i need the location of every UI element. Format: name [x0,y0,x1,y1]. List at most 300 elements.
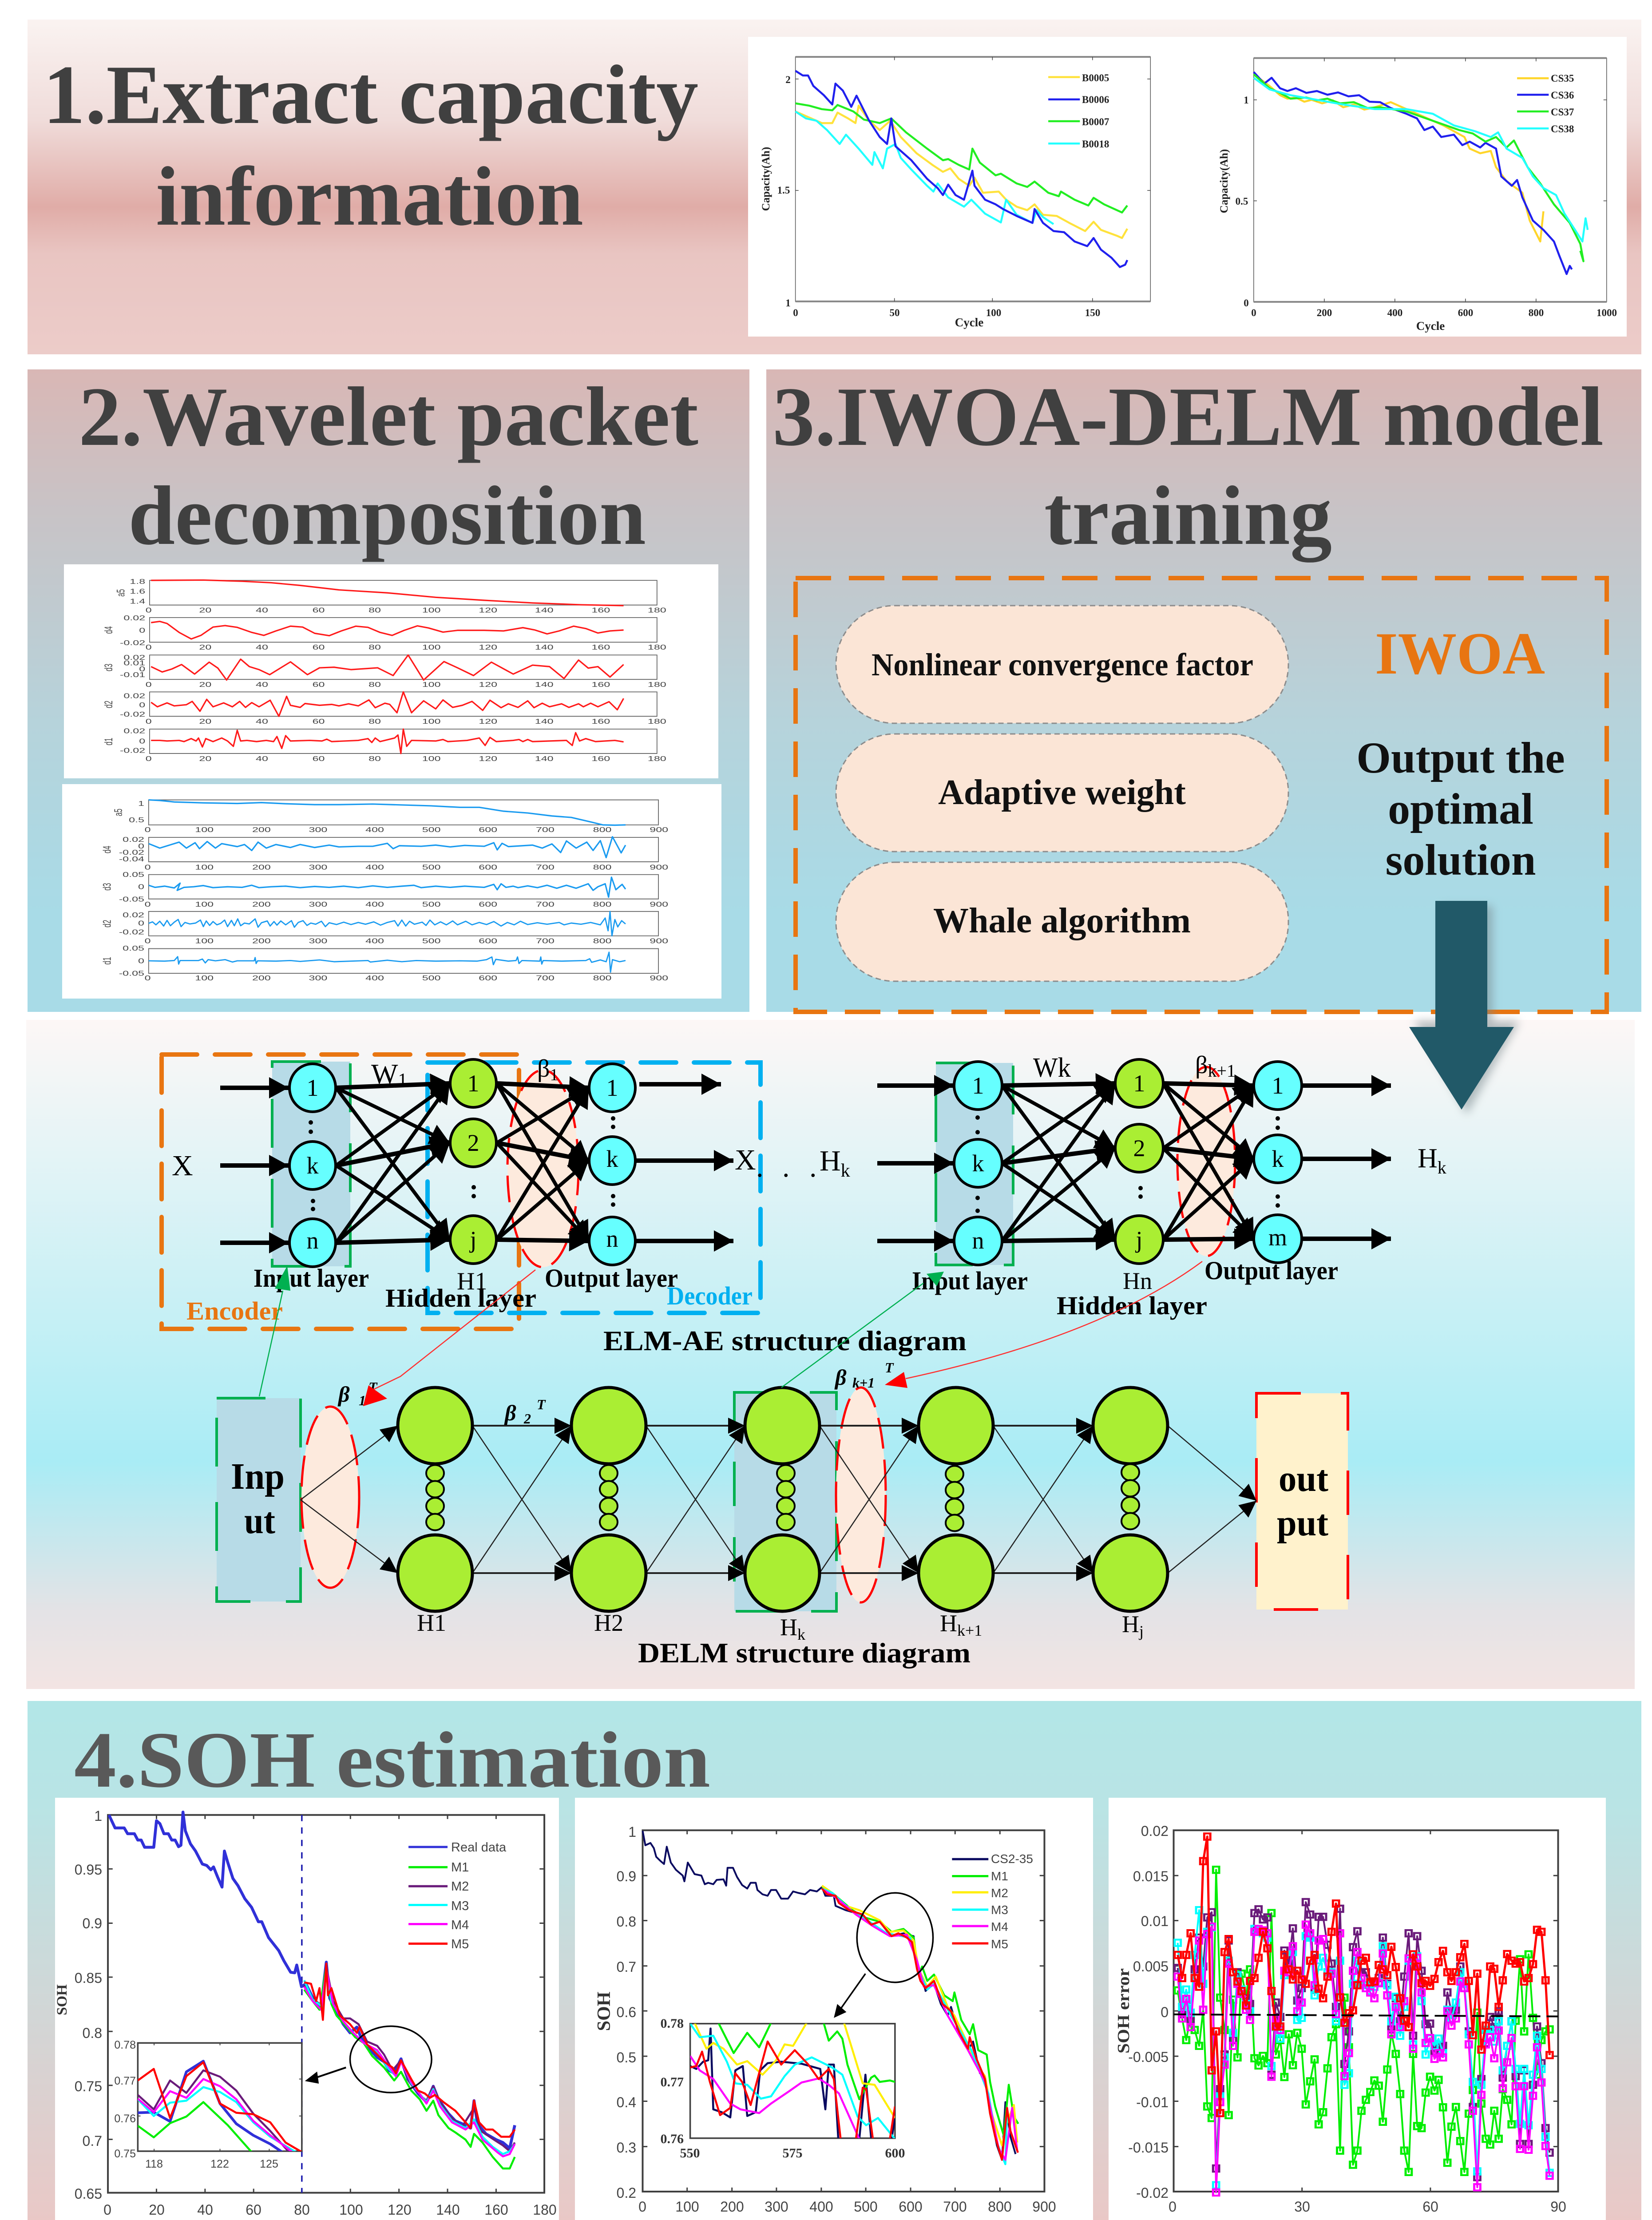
wavelet chart: red decomposition: 0.02 [123,654,145,662]
beta labels: k+1 [852,1375,875,1391]
beta labels: T [885,1360,894,1376]
chart B: SOH estimation CS2: M5 [991,1937,1008,1951]
chart B: SOH estimation CS2: 0.6 [617,2004,636,2020]
chart A: SOH estimation NASA: 140 [436,2202,460,2218]
wavelet chart: red decomposition: 140 [535,755,554,762]
labels ELM-AE left: 1 [398,1070,407,1090]
wavelet chart: red decomposition: 20 [199,755,211,762]
neurons input [289,1064,635,1267]
neuron labels: k [1272,1146,1284,1172]
wavelet chart: blue decomposition: 0.02 [123,912,144,919]
wavelet chart: blue decomposition: 0.05 [123,945,144,952]
chart C: SOH error: 0.015 [1133,1868,1169,1884]
wavelet chart: blue decomposition: 0 [145,937,151,945]
text: output the optimal solution: optimal [1388,784,1533,833]
neuron labels: 2 [467,1130,479,1156]
neuron labels: k [306,1152,319,1179]
wavelet chart: blue decomposition: 0 [145,864,151,871]
input block: ut [244,1500,275,1542]
DELM layer labels: k+1 [957,1621,982,1639]
wavelet chart: red decomposition: -0.02 [120,639,145,647]
wavelet chart: blue decomposition: 0.5 [129,816,144,824]
chart B: SOH estimation CS2: 0.5 [617,2050,636,2065]
wavelet chart: blue decomposition: d2 [101,920,114,928]
panel 2 background [28,369,749,1012]
labels ELM-AE left: W [371,1058,398,1090]
chart B: SOH estimation CS2: 600 [885,2146,905,2161]
neurons hidden [1115,1059,1163,1264]
wavelet chart: blue decomposition: -0.02 [119,928,144,936]
wavelet chart: blue decomposition: 200 [252,975,271,982]
wavelet chart: red decomposition: 100 [422,718,441,725]
chart A: SOH estimation NASA: 180 [533,2202,557,2218]
labels ELM-AE left: . [782,1151,789,1183]
wavelet chart: blue decomposition: 1 [138,800,144,808]
chart: NASA battery capacity curves: B0005 [1082,72,1109,83]
wavelet chart: blue decomposition: 400 [365,864,384,871]
beta labels: T [537,1396,546,1412]
chart C: SOH error: -0.015 [1128,2140,1169,2156]
chart: NASA battery capacity curves: Capacity(Ah) [760,147,772,211]
chart: NASA battery capacity curves: 2 [785,74,791,85]
labels ELM-AE left: . [809,1151,817,1183]
chart A: SOH estimation NASA: 0.65 [75,2186,102,2202]
beta labels: β [337,1382,350,1407]
wavelet chart: blue decomposition: 700 [536,975,555,982]
hidden block Hk highlight [734,1392,836,1611]
wavelet chart: red decomposition: 40 [256,718,268,725]
chart A: SOH estimation NASA: 80 [294,2202,310,2218]
chart: NASA battery capacity curves: 0 [793,307,798,318]
wavelet chart: red decomposition: 100 [422,644,441,651]
ELM-AE network: second stage: Output layer [1204,1256,1338,1285]
ELM-AE network: encoder and decoder: Input layer [254,1264,369,1292]
encoder dashed box [162,1054,519,1329]
ELM-AE network: encoder and decoder: Encoder [186,1296,283,1325]
wavelet chart: blue decomposition: 800 [593,975,611,982]
wavelet chart: red decomposition: 0 [139,737,145,745]
middle panel background [26,1020,1635,1689]
panel: ELM-AE and DELM structure [26,1020,1635,1689]
chart A: SOH estimation NASA: 20 [149,2202,165,2218]
wavelet chart: blue decomposition: 0 [138,842,144,850]
wavelet chart: blue decomposition: 600 [479,901,497,908]
beta labels: β [504,1400,516,1425]
wavelet chart: red decomposition: 1.6 [130,588,145,595]
panel 3: IWOA-DELM model training [766,369,1641,1012]
wavelet chart: red decomposition: 0 [146,755,152,762]
wavelet chart: red decomposition: 20 [199,644,211,651]
wavelet chart: red decomposition: 100 [422,755,441,762]
DELM neurons [398,1388,1168,1611]
chart: CS2 battery capacity curves [1218,58,1617,333]
chart C: SOH error: 0.01 [1141,1913,1169,1929]
neuron labels [972,1070,1287,1254]
wavelet chart: red decomposition: 40 [256,681,268,689]
wavelet chart: red decomposition: -0.01 [120,671,145,679]
wavelet chart: blue decomposition: 500 [422,937,441,945]
chart: CS2 battery capacity curves: 800 [1529,307,1544,318]
wavelet chart: red decomposition: 120 [479,644,497,651]
wavelet chart: blue decomposition: 300 [309,901,327,908]
chart B: SOH estimation CS2: 0.3 [617,2140,636,2156]
wavelet chart: red decomposition: 1.8 [130,578,145,586]
panel 3 background [766,369,1641,1012]
chart B: SOH estimation CS2: 100 [675,2199,699,2215]
chart A: SOH estimation NASA [54,1798,559,2220]
DELM network [217,1360,1348,1643]
ELM-AE network: encoder and decoder [162,1054,850,1329]
chart B: SOH estimation CS2: 700 [943,2199,967,2215]
panel 2: wavelet packet decomposition [28,369,749,1012]
neuron labels: 1 [1133,1070,1145,1097]
chart B: SOH estimation CS2: 500 [854,2199,878,2215]
chart A: SOH estimation NASA: 0.78 [114,2039,136,2051]
DELM layer labels: H [780,1614,797,1641]
arrow: red beta link 1 [363,1270,535,1406]
DELM layer labels: j [1138,1622,1144,1640]
neurons input and output [954,1062,1302,1265]
wavelet chart: blue decomposition: 100 [195,826,214,834]
wavelet chart: red decomposition: 180 [648,681,666,689]
chart A: SOH estimation NASA: 0 [103,2202,111,2218]
wavelet chart: blue decomposition: 900 [650,901,668,908]
wavelet chart: red decomposition: 60 [313,755,325,762]
wavelet chart: red decomposition: 0.02 [123,727,145,735]
heading: 1.Extract capacity information: 1.Extract capacity [43,48,698,142]
DELM layer labels: k [797,1625,805,1643]
heading: ELM-AE structure diagram: ELM-AE structure diagram [603,1325,967,1356]
vertical dots [309,1116,615,1211]
arrow: from model training to structure diagram [1409,901,1519,1114]
IWOA dashed box [796,578,1607,1012]
wavelet chart: red decomposition: 180 [648,644,666,651]
wavelet chart: red decomposition: 0.02 [123,692,145,700]
chart C: SOH error: 0.005 [1133,1958,1169,1974]
wavelet chart: red decomposition: 180 [648,607,666,614]
chart B: SOH estimation CS2: 0 [638,2199,646,2215]
wavelet chart: red decomposition: -0.02 [120,747,145,754]
chart A: SOH estimation NASA: Real data [451,1840,507,1855]
pill: nonlinear convergence factor: Nonlinear convergence factor [872,647,1253,682]
wavelet chart: blue decomposition: 0 [138,957,144,965]
wavelet chart: blue decomposition: -0.05 [119,896,144,903]
chart C: SOH error: 60 [1422,2199,1438,2215]
chart A: SOH estimation NASA: 100 [339,2202,363,2218]
wavelet chart: red decomposition: 60 [313,681,325,689]
chart: NASA battery capacity curves: B0007 [1082,116,1109,127]
neuron labels: 1 [306,1074,319,1101]
arrow: green input link 2 [781,1272,944,1388]
wavelet chart: blue decomposition: d3 [101,883,114,891]
chart A: SOH estimation NASA: M1 [451,1860,469,1875]
vertical dots [975,1115,1280,1213]
wavelet chart: red decomposition: 120 [479,607,497,614]
wavelet chart: red decomposition: 160 [591,755,610,762]
chart A: SOH estimation NASA: 120 [388,2202,412,2218]
chart C: SOH error: 0 [1169,2199,1177,2215]
ELM-AE network: second stage: Hidden layer [1057,1291,1207,1320]
wavelet chart: red decomposition: d2 [103,701,115,708]
wavelet chart: blue decomposition: 500 [422,864,441,871]
chart: NASA battery capacity curves: 1 [785,297,791,309]
chart A: SOH estimation NASA: 0.75 [75,2078,102,2094]
pill: whale algorithm [836,862,1288,981]
wavelet chart: red decomposition: 180 [648,755,666,762]
chart B: SOH estimation CS2: 200 [720,2199,744,2215]
wavelet chart: red decomposition: 80 [368,607,381,614]
wavelet chart: blue decomposition: 0 [138,883,144,891]
labels ELM-AE left: H1 [457,1268,487,1295]
chart A: SOH estimation NASA: 122 [210,2158,229,2170]
wavelet chart: blue decomposition: 0 [145,975,151,982]
chart B: SOH estimation CS2: 400 [809,2199,833,2215]
wavelet chart: red decomposition [64,564,718,778]
chart B: SOH estimation CS2: 800 [988,2199,1012,2215]
wavelet chart: blue decomposition: -0.04 [119,856,144,863]
chart B: SOH estimation CS2: M1 [991,1869,1008,1883]
chart B: SOH estimation CS2: 1 [628,1824,636,1840]
heading: 3.IWOA-DELM model training: training [1044,469,1332,563]
decoder dashed box [428,1062,761,1313]
chart C: SOH error: 90 [1550,2199,1566,2215]
wavelet chart: blue decomposition: 500 [422,901,441,908]
connections encoder [220,1083,733,1243]
wavelet chart: red decomposition: 140 [535,607,554,614]
neuron labels: n [306,1227,319,1254]
wavelet chart: blue decomposition: 0 [145,826,151,834]
ELM-AE network: encoder and decoder: Output layer [545,1264,678,1292]
wavelet chart: red decomposition: 80 [368,644,381,651]
wavelet chart: red decomposition: 20 [199,718,211,725]
beta k+1 ellipse [1177,1067,1235,1256]
neuron labels: 2 [1133,1135,1145,1162]
beta labels: T [368,1379,378,1395]
wavelet chart: blue decomposition: 700 [536,826,555,834]
wavelet chart: blue decomposition: 900 [650,937,668,945]
wavelet chart: blue decomposition: 100 [195,901,214,908]
wavelet chart: blue decomposition: 200 [252,826,271,834]
wavelet chart: red decomposition: 120 [479,718,497,725]
chart C: SOH error: -0.01 [1136,2094,1169,2110]
heading: 1.Extract capacity information [43,48,698,243]
pill: adaptive weight [836,734,1288,852]
labels second stage: Hn [1123,1268,1152,1294]
wavelet chart: blue decomposition: 800 [593,937,611,945]
pill: adaptive weight: Adaptive weight [938,773,1186,812]
ELM-AE network: second stage: Input layer [912,1266,1028,1295]
heading: 2.Wavelet packet decomposition: decomposition [128,469,646,563]
chart A: SOH estimation NASA: SOH [54,1984,70,2015]
input block [217,1398,301,1602]
chart A: SOH estimation NASA: 125 [260,2158,278,2170]
neuron labels: n [606,1225,618,1252]
ELM-AE network: encoder and decoder: Hidden layer [385,1284,536,1312]
chart: CS2 battery capacity curves: 600 [1458,307,1473,318]
heading: 3.IWOA-DELM model training: 3.IWOA-DELM model [773,370,1604,464]
chart C: SOH error: 0.02 [1141,1823,1169,1839]
wavelet chart: blue decomposition: 100 [195,937,214,945]
output block: out [1279,1458,1328,1499]
wavelet chart: red decomposition: d4 [103,626,115,634]
beta labels: 1 [359,1392,366,1408]
chart B: SOH estimation CS2: 550 [680,2146,700,2161]
DELM layer labels: H2 [594,1610,623,1636]
wavelet chart: red decomposition: 160 [591,644,610,651]
neuron labels: 1 [606,1074,618,1101]
neuron labels: 1 [972,1072,984,1099]
ELM-AE network: encoder and decoder: Decoder [667,1281,753,1310]
wavelet chart: blue decomposition: 600 [479,975,497,982]
wavelet chart: red decomposition: 40 [256,644,268,651]
chart B: SOH estimation CS2: 300 [765,2199,788,2215]
wavelet chart: blue decomposition: 300 [309,937,327,945]
labels ELM-AE left: X [172,1150,193,1182]
chart B: SOH estimation CS2 [575,1798,1093,2220]
chart A: SOH estimation NASA: 0.76 [114,2113,136,2125]
wavelet chart: blue decomposition: 0.05 [123,871,144,879]
wavelet chart: red decomposition: 80 [368,718,381,725]
wavelet chart: blue decomposition: 600 [479,864,497,871]
chart A: SOH estimation NASA: M3 [451,1899,469,1913]
wavelet chart: blue decomposition: 200 [252,864,271,871]
chart: NASA battery capacity curves: 50 [890,307,899,318]
wavelet chart: blue decomposition: -0.02 [119,849,144,856]
DELM layer labels: H [940,1610,957,1637]
wavelet chart: red decomposition: 140 [535,644,554,651]
chart B: SOH estimation CS2: 900 [1032,2199,1056,2215]
wavelet chart: blue decomposition: 300 [309,826,327,834]
chart: CS2 battery capacity curves: CS36 [1551,90,1574,101]
chart: CS2 battery capacity curves: 1000 [1597,307,1617,318]
heading: 2.Wavelet packet decomposition [79,370,698,563]
wavelet chart: blue decomposition: d4 [101,846,114,853]
wavelet chart: blue decomposition: 600 [479,937,497,945]
output block [1256,1393,1348,1610]
wavelet chart: blue decomposition: 600 [479,826,497,834]
DELM layer labels [417,1610,1144,1643]
chart A: SOH estimation NASA: 0.77 [114,2075,136,2087]
wavelet chart: blue decomposition: 700 [536,864,555,871]
chart B: SOH estimation CS2: M3 [991,1903,1008,1917]
wavelet chart: red decomposition: d3 [103,664,115,671]
wavelet chart: red decomposition: 140 [535,681,554,689]
chart A: SOH estimation NASA: 60 [246,2202,261,2218]
chart: CS2 battery capacity curves: 0 [1251,307,1256,318]
output block: put [1277,1502,1328,1544]
chart: CS2 battery capacity curves: CS38 [1551,123,1574,135]
neuron labels: k [606,1146,618,1172]
chart A: SOH estimation NASA: 1 [94,1808,102,1824]
wavelet chart: red decomposition: 0 [146,681,152,689]
wavelet chart: red decomposition: 0.01 [123,659,145,667]
wavelet chart: blue decomposition: 400 [365,826,384,834]
beta k+1 ellipse [836,1388,886,1602]
wavelet chart: blue decomposition: 700 [536,901,555,908]
chart A: SOH estimation NASA: M5 [451,1937,469,1951]
beta labels: β [834,1365,847,1390]
text: output the optimal solution: Output the [1356,733,1565,782]
chart A: SOH estimation NASA: M4 [451,1918,469,1932]
labels ELM-AE left: k [841,1161,850,1181]
chart A: SOH estimation NASA: 0.95 [75,1862,102,1878]
chart B: SOH estimation CS2: 0.8 [617,1914,636,1930]
wavelet chart: red decomposition: 0.02 [123,614,145,622]
heading: DELM structure diagram: DELM structure diagram [638,1637,971,1669]
DELM layer labels: H1 [417,1610,446,1636]
neuron labels: j [1135,1226,1143,1253]
capacity charts white card [748,37,1627,337]
chart: NASA battery capacity curves: 1.5 [777,185,790,196]
neuron labels: 1 [1272,1072,1284,1099]
chart: NASA battery capacity curves: Cycle [955,316,983,329]
wavelet chart: blue decomposition: 500 [422,975,441,982]
chart C: SOH error: 30 [1294,2199,1310,2215]
wavelet chart: blue decomposition: 800 [593,826,611,834]
chart: NASA battery capacity curves: B0018 [1082,139,1109,150]
wavelet chart: blue decomposition [62,784,721,999]
panel 4 background [28,1701,1641,2220]
chart: CS2 battery capacity curves: 400 [1387,307,1402,318]
wavelet chart: red decomposition: 80 [368,681,381,689]
beta 1 ellipse [301,1407,359,1588]
beta labels: 2 [523,1411,531,1427]
wavelet chart: red decomposition: 140 [535,718,554,725]
chart B: SOH estimation CS2: SOH [594,1992,614,2031]
wavelet chart: red decomposition: 60 [313,718,325,725]
chart B: SOH estimation CS2: 575 [782,2146,803,2161]
wavelet chart: red decomposition: 1.4 [130,598,145,605]
wavelet chart: blue decomposition: 400 [365,975,384,982]
labels ELM-AE left: 1 [550,1066,559,1084]
chart B: SOH estimation CS2: M2 [991,1886,1008,1900]
wavelet chart: blue decomposition: 800 [593,901,611,908]
wavelet chart: blue decomposition: 400 [365,901,384,908]
chart C: SOH error [1109,1798,1606,2220]
wavelet chart: red decomposition: 20 [199,681,211,689]
wavelet chart: red decomposition: 160 [591,607,610,614]
labels second stage: k+1 [1208,1061,1236,1081]
wavelet chart: red decomposition: 60 [313,644,325,651]
chart: CS2 battery capacity curves: CS35 [1551,73,1574,84]
labels second stage: k [1438,1158,1446,1177]
DELM layer labels: H [1122,1611,1139,1637]
chart: CS2 battery capacity curves: 200 [1317,307,1332,318]
chart A: SOH estimation NASA: 0.8 [83,2025,102,2041]
wavelet chart: blue decomposition: 900 [650,864,668,871]
wavelet chart: blue decomposition: 500 [422,826,441,834]
neuron labels: 1 [467,1070,479,1097]
arrow: green input link 1 [259,1266,290,1396]
chart: CS2 battery capacity curves: Cycle [1416,319,1445,333]
wavelet chart: blue decomposition: 100 [195,864,214,871]
chart A: SOH estimation NASA: 40 [197,2202,213,2218]
chart: NASA battery capacity curves: 150 [1085,307,1100,318]
wavelet chart: blue decomposition: 300 [309,975,327,982]
input block: Inp [231,1456,285,1497]
chart: CS2 battery capacity curves: 1 [1244,95,1249,106]
wavelet chart: red decomposition: 20 [199,607,211,614]
DELM connections [301,1426,1256,1573]
wavelet chart: blue decomposition: 700 [536,937,555,945]
wavelet chart: red decomposition: 180 [648,718,666,725]
chart B: SOH estimation CS2: 0.77 [661,2075,684,2089]
chart: CS2 battery capacity curves: 0 [1244,297,1249,309]
chart: CS2 battery capacity curves: CS37 [1551,107,1574,118]
wavelet chart: red decomposition: 40 [256,607,268,614]
wavelet chart: red decomposition: 0 [146,718,152,725]
wavelet chart: red decomposition: 0 [139,666,145,673]
